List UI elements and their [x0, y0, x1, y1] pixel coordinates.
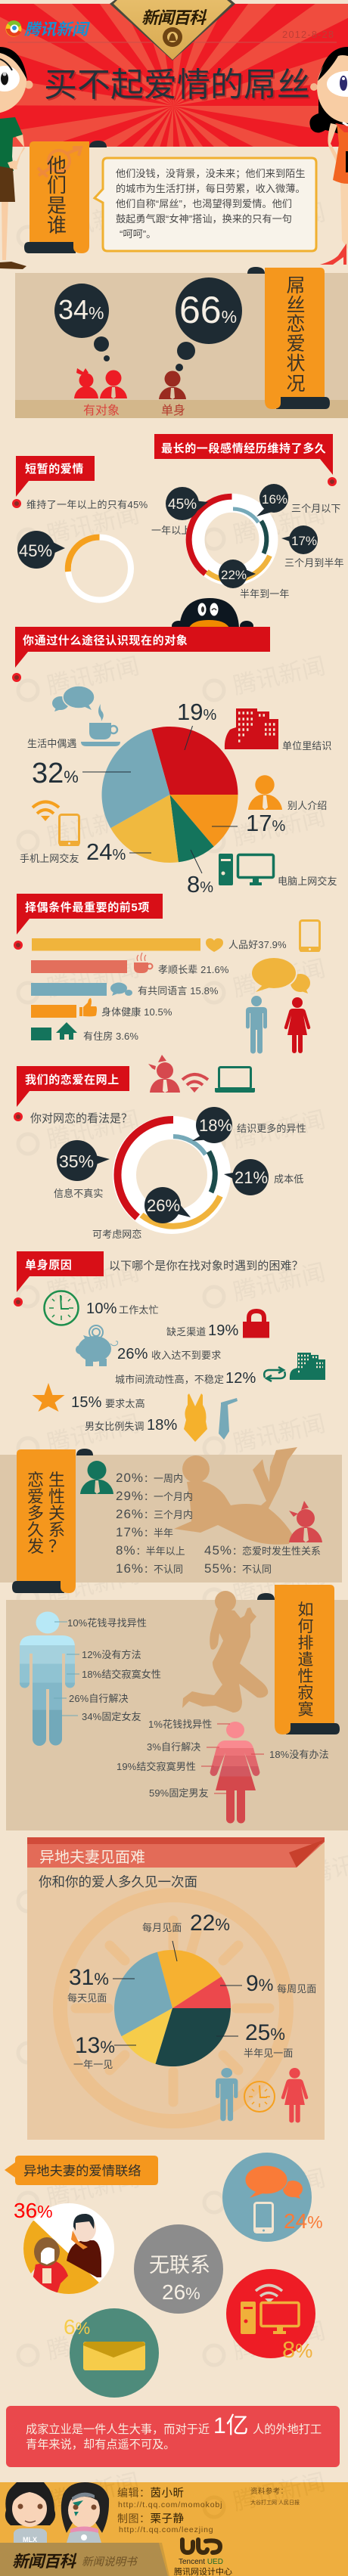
circle: no contact 26%: 无联系 [149, 2254, 210, 2277]
value labels: 一年一见 [73, 2059, 113, 2070]
scroll heading: 屌丝恋爱状况 [247, 267, 330, 409]
icon: exchange arrows [264, 1367, 285, 1381]
labels: men: 18%结交寂寞女性 [82, 1669, 161, 1680]
labels: men: 26%自行解决 [69, 1693, 129, 1704]
timing list: 29%：一个月内 [116, 1489, 193, 1503]
scroll heading: 恋爱多久发生性关系: 恋爱多久发 [27, 1471, 44, 1556]
value: 8%: 8% [187, 871, 213, 897]
pie chart: meeting frequency [114, 1950, 231, 2066]
marker dot [12, 673, 21, 682]
credits [117, 2487, 300, 2534]
value labels: 25% [245, 2020, 285, 2045]
icon: couple [74, 368, 127, 398]
leader lines [113, 1941, 242, 2045]
icon: man figure [216, 2068, 238, 2121]
tab: news encyclopedia [0, 2543, 169, 2576]
icon: person green [80, 1461, 113, 1494]
timing list [116, 1471, 321, 1576]
reason: 城市间流动性高 12%: 12% [225, 1370, 256, 1387]
value labels: 9% [246, 1971, 273, 1996]
footer: 腾讯新闻 [45, 2469, 141, 2516]
label: 别人介绍: 别人介绍 [287, 800, 327, 811]
reason: 10% 工作太忙: 工作太忙 [119, 1304, 159, 1316]
donut: duration: 半年到一年 [240, 588, 290, 600]
callout: conclusion [6, 2406, 340, 2467]
bubble: 16%: 16% [262, 492, 287, 507]
text: 腾讯新闻 [45, 2469, 141, 2516]
icon: man figure [246, 996, 267, 1054]
labels: men: 10%花钱寻找异性 [67, 1617, 147, 1629]
icon: green clock [44, 1291, 79, 1325]
icon: chat and coffee [52, 686, 120, 746]
scroll heading: 恋爱多久发生性关系 [12, 1449, 93, 1593]
panel: sexual relations timing [0, 1447, 342, 1582]
ribbon: 单身原因: 单身原因 [25, 1258, 72, 1272]
value labels: 每天见面 [67, 1992, 107, 2004]
figure: man gradient [20, 1612, 79, 1746]
bubble: 22% [219, 560, 256, 588]
bubble: 17% [281, 525, 318, 554]
value: 17%: 17% [246, 810, 285, 836]
labels: women: 19%结交寂寞男性 [117, 1761, 196, 1772]
donut: duration: 三个月以下 [291, 503, 341, 514]
marker dot [14, 1112, 23, 1121]
logo: Tencent UED [174, 2540, 232, 2576]
date: 2012-8-28 [282, 29, 334, 40]
ribbon: 你通过什么途径: 你通过什么途径认识现在的对象 [23, 634, 188, 647]
donut: 45% [17, 531, 131, 600]
bubble: 18%: 18% [199, 1116, 232, 1135]
text: 腾讯新闻 [231, 1259, 328, 1306]
text: 腾讯新闻 [231, 955, 328, 1002]
title: 买不起爱情的屌丝 [45, 68, 312, 105]
bubble: 21% [224, 1159, 269, 1195]
marker dot [328, 477, 337, 486]
text: 腾讯新闻 [231, 2165, 328, 2212]
circle: letter 6% [64, 2308, 159, 2398]
gold emblem: 新闻百科 [141, 8, 207, 27]
value: 32%: 32% [32, 758, 79, 789]
portrait: editor: MLX [23, 2536, 37, 2543]
callout: conclusion: 1亿 [213, 2413, 249, 2438]
scroll heading: 他们是谁 [24, 141, 107, 253]
bar: 人品好: 人品好37.9% [228, 939, 287, 950]
text: 腾讯新闻 [45, 1106, 141, 1153]
timing list: 45%：恋爱时发生性关系 [204, 1543, 321, 1558]
credits: 资料参考： [250, 2487, 288, 2496]
question: 以下哪个: 以下哪个是你在找对象时遇到的困难？ [109, 1260, 303, 1273]
label: 单位里结识: 单位里结识 [282, 740, 332, 752]
bar: 身体健康 [31, 998, 172, 1018]
scroll heading: 他们是谁: 他们是谁 [47, 154, 67, 237]
timing list: 16%：不认同 [116, 1561, 183, 1576]
text: 维持了一年以上: 维持了一年以上的只有45% [26, 499, 148, 510]
bubble: 34% [54, 284, 110, 361]
labels: women: 59%固定男友 [149, 1787, 209, 1799]
scroll heading: 屌丝恋爱状况: 屌丝恋爱状况 [286, 275, 306, 395]
bar: 有住房: 有住房 3.6% [83, 1031, 138, 1042]
icon: woman figure [284, 997, 310, 1053]
speech box [95, 158, 316, 251]
marker dot [14, 1297, 23, 1307]
credits: 大谷打工网 人民日报 [250, 2499, 300, 2506]
bubble: 26%: 26% [147, 1196, 180, 1215]
header ribbon: 异地夫妻见面难 [39, 1849, 145, 1866]
icon: orange clock [244, 2082, 275, 2112]
text: 腾讯新闻 [45, 804, 141, 851]
value labels: 31% [69, 1965, 109, 1990]
bubble: 45% [166, 487, 208, 520]
bar: 孝顺长辈: 孝顺长辈 21.6% [158, 964, 229, 975]
text: 腾讯新闻 [45, 2165, 141, 2212]
reason: 26% 收入达不到要求: 26% [117, 1346, 148, 1362]
bubble: 35%: 35% [59, 1152, 94, 1171]
marker dot [14, 941, 23, 950]
circle: no contact 26% [134, 2224, 223, 2314]
bar: 有共同语言: 有共同语言 15.8% [138, 985, 219, 997]
bubble: 21%: 21% [235, 1168, 268, 1187]
icon: star [32, 1383, 65, 1412]
donut: duration: 一年以上 [151, 525, 191, 536]
icon: girl, wifi, laptop [148, 1055, 255, 1093]
credits: 制图：栗子静 [117, 2512, 185, 2525]
icon: orange person [248, 775, 282, 810]
text: 腾讯新闻 [231, 804, 328, 851]
labels: men: 12%没有方法 [82, 1649, 141, 1660]
bubble: 45%: 45% [168, 497, 197, 513]
value labels: 22% [190, 1911, 230, 1936]
icon: green buildings [290, 1353, 325, 1380]
reason: 男女比例失调 18%: 18% [147, 1417, 177, 1434]
bubble: 22%: 22% [221, 568, 247, 582]
ribbon: 最长的一段感情: 最长的一段感情经历维持了多久 [161, 442, 326, 455]
circle: computer 8% [226, 2269, 315, 2363]
icon: phone [300, 921, 320, 952]
value: 24%: 24% [86, 839, 126, 865]
marker dot [12, 499, 21, 508]
title: 买不起爱情的屌丝 [44, 67, 310, 104]
labels: men: 34%固定女友 [82, 1711, 141, 1722]
bar: 身体健康: 身体健康 10.5% [101, 1006, 172, 1018]
panel: long-distance couples [27, 1837, 325, 2140]
text: 腾讯新闻 [231, 1106, 328, 1153]
speech box: “呵呵”。 [120, 228, 156, 240]
reason: 15% 要求太高: 15% [71, 1394, 102, 1411]
icon: swimsuit [184, 1393, 207, 1442]
value labels: 每月见面 [142, 1922, 182, 1933]
value: 19%: 19% [177, 699, 216, 725]
labels: women: 3%自行解决 [147, 1741, 200, 1753]
text: 腾讯新闻 [45, 1259, 141, 1306]
donut: duration: 三个月到半年 [284, 557, 344, 569]
pie chart: how you met [102, 727, 238, 863]
icon: necktie [219, 1398, 238, 1440]
ribbon: 异地夫妻的爱情联络: 异地夫妻的爱情联络 [23, 2163, 141, 2178]
text: 腾讯新闻 [231, 2469, 328, 2516]
reason: 15% 要求太高: 要求太高 [105, 1398, 145, 1409]
bubble: 34%: 34% [58, 294, 104, 325]
circle: phone 24%: 24% [284, 2209, 323, 2233]
circle: couple on phone 36% [14, 2203, 114, 2294]
icon: wifi and phone [33, 801, 79, 846]
ribbon: 短暂的爱情: 短暂的爱情 [25, 462, 84, 476]
icon: girl red [289, 1501, 322, 1542]
circle: phone 24% [222, 2153, 323, 2242]
reason: 城市间流动性高 12%: 城市间流动性高，不稳定 [115, 1374, 224, 1385]
panel: relieving loneliness [6, 1591, 348, 1830]
text: 腾讯新闻 [231, 501, 328, 548]
donut: online dating views: 结识更多的异性 [237, 1123, 306, 1134]
text: 腾讯新闻 [45, 2317, 141, 2364]
bar chart: top 5 conditions [31, 938, 287, 1042]
reason: 缺乏渠道 19%: 缺乏渠道 [166, 1326, 206, 1338]
label: 生活中偶遇: 生活中偶遇 [27, 738, 77, 749]
speech box: 鼓起勇气跟“女神”搭讪，换来的只有一句 [116, 212, 292, 225]
character: woman [309, 47, 348, 265]
silhouette: kneeling woman [182, 1591, 268, 1713]
icon: penguin [172, 598, 253, 631]
text: 腾讯新闻 [231, 199, 328, 246]
tab: news encyclopedia: 新闻说明书 [82, 2556, 138, 2568]
circle: couple on phone 36%: 36% [14, 2199, 53, 2222]
text: 腾讯新闻 [45, 653, 141, 699]
credits: http://t.qq.com/leezjing [119, 2525, 213, 2534]
silhouette: lying woman [174, 1447, 297, 1545]
portrait: designer [61, 2482, 109, 2543]
panel: dating status [15, 267, 348, 418]
ribbon: 我们的恋爱在网上 [17, 1066, 129, 1107]
label: 单身: 单身 [161, 404, 185, 417]
label: 手机上网交友: 手机上网交友 [20, 853, 79, 864]
circle: letter 6%: 6% [64, 2315, 90, 2339]
speech box: 他们自称“屌丝”，也渴望得到爱情。他们 [116, 197, 292, 209]
footer: 腾讯新闻 [231, 2469, 328, 2516]
bubble: 66%: 66% [179, 289, 237, 331]
text: 腾讯新闻 [231, 2317, 328, 2364]
label: 有对象: 有对象 [83, 404, 120, 417]
ribbon: 单身原因 [17, 1251, 104, 1292]
icon: woman figure [281, 2068, 308, 2123]
header ribbon [27, 1837, 325, 1868]
bar: 人品好 [32, 938, 287, 952]
donut: online dating views: 可考虑网恋 [92, 1229, 142, 1240]
callout: conclusion: 人的外地打工 [253, 2423, 322, 2436]
bubble: 26% [144, 1187, 191, 1223]
label: 电脑上网交友: 电脑上网交友 [278, 876, 337, 887]
bubble: 66% [176, 277, 242, 371]
text: 腾讯新闻 [45, 1410, 141, 1457]
text: 腾讯新闻 [45, 501, 141, 548]
icon: office buildings [225, 708, 278, 749]
text: 腾讯新闻 [45, 955, 141, 1002]
figure: woman gradient [201, 1722, 264, 1824]
ribbon: 最长的一段感情 [154, 434, 333, 475]
ribbon: 异地夫妻的爱情联络 [5, 2156, 158, 2185]
timing list: 55%：不认同 [204, 1561, 272, 1576]
speech box: 他们没钱，没背景，没未来；他们来到陌生 [116, 168, 306, 180]
bar: 有住房 [31, 1022, 138, 1042]
ribbon: 你通过什么途径 [15, 627, 270, 668]
labels: women: 1%花钱找异性 [148, 1719, 212, 1730]
ribbon: 择偶条件: 择偶条件最重要的前5项 [25, 901, 150, 914]
icon: piggy bank [76, 1325, 118, 1366]
header banner [0, 0, 348, 147]
text: 腾讯新闻 [231, 1561, 328, 1608]
scroll heading: 如何排遣性寂寞: 如何排遣性寂寞 [298, 1601, 313, 1719]
icon: conversation bubbles [250, 956, 310, 994]
icon: single man [159, 370, 186, 399]
footer [0, 2482, 348, 2576]
labels: men [67, 1617, 161, 1722]
timing list: 8%：半年以上 [116, 1543, 185, 1558]
donut: duration [151, 484, 344, 600]
logo: Tencent News: 腾讯新闻 [24, 21, 90, 39]
reason: 缺乏渠道 19%: 19% [208, 1322, 238, 1339]
bubble: 17%: 17% [291, 534, 317, 548]
text: 腾讯新闻 [231, 1410, 328, 1457]
value labels: 13% [75, 2033, 115, 2058]
scroll heading: 如何排遣性寂寞 [257, 1585, 340, 1734]
donut: online dating views: 信息不真实 [54, 1188, 104, 1199]
question: 你对网恋的看法是: 你对网恋的看法是？ [30, 1111, 132, 1125]
speech box: 的城市为生活打拼，每日劳累，收入微薄。 [116, 182, 306, 194]
callout: conclusion: 青年来说，却有点遥不可及。 [26, 2438, 175, 2451]
bar: 孝顺长辈 [31, 953, 229, 975]
text: 腾讯新闻 [45, 199, 141, 246]
timing list: 20%：一周内 [116, 1471, 183, 1485]
portrait: editor [5, 2482, 55, 2543]
labels: women [117, 1719, 329, 1799]
leader lines [82, 726, 238, 873]
timing list: 26%：三个月内 [116, 1507, 193, 1521]
circle: no contact 26%: 26% [162, 2280, 200, 2304]
bubble: 18% [192, 1107, 232, 1143]
gold emblem [110, 0, 235, 60]
labels: women: 18%没有办法 [269, 1749, 329, 1760]
bar: 有共同语言 [31, 983, 219, 997]
text: 腾讯新闻 [231, 653, 328, 699]
bubble: 35% [57, 1140, 110, 1181]
tab: news encyclopedia: 新闻百科 [12, 2553, 76, 2571]
text: 腾讯新闻 [45, 1561, 141, 1608]
icon: desktop computer [219, 854, 274, 885]
clock watermark [61, 1895, 286, 2122]
donut: online dating views [54, 1107, 306, 1240]
ribbon: 短暂的爱情 [16, 456, 95, 497]
timing list: 17%：半年 [116, 1525, 173, 1539]
ribbon: 我们的恋爱在网上: 我们的恋爱在网上 [25, 1073, 120, 1087]
scroll heading: 恋爱多久发生性关系: 生性关系？ [48, 1471, 65, 1556]
logo: Tencent UED: Tencent UED [179, 2558, 223, 2566]
value labels: 半年见一面 [244, 2047, 294, 2059]
donut: 45%: 45% [19, 541, 52, 560]
question: 你和你的爱人多久见一次面 [39, 1874, 197, 1889]
credits: http://t.qq.com/momokobj [118, 2500, 222, 2509]
circle: computer 8%: 8% [282, 2336, 312, 2363]
value labels [67, 1911, 316, 2070]
callout: conclusion: 成家立业是一件人生大事，而对于近 [26, 2423, 210, 2436]
reason: 男女比例失调 18%: 男女比例失调 [85, 1421, 144, 1432]
ribbon: 择偶条件 [17, 894, 163, 935]
bubble: 16% [256, 484, 288, 516]
reason: 26% 收入达不到要求: 收入达不到要求 [151, 1350, 221, 1361]
icon: padlock [243, 1311, 269, 1338]
credits: 编辑：茵小昕 [117, 2487, 185, 2500]
reason: 10% 工作太忙: 10% [86, 1300, 117, 1317]
value labels: 每周见面 [277, 1983, 316, 1995]
donut: online dating views: 成本低 [274, 1173, 303, 1185]
character: man [0, 47, 33, 269]
